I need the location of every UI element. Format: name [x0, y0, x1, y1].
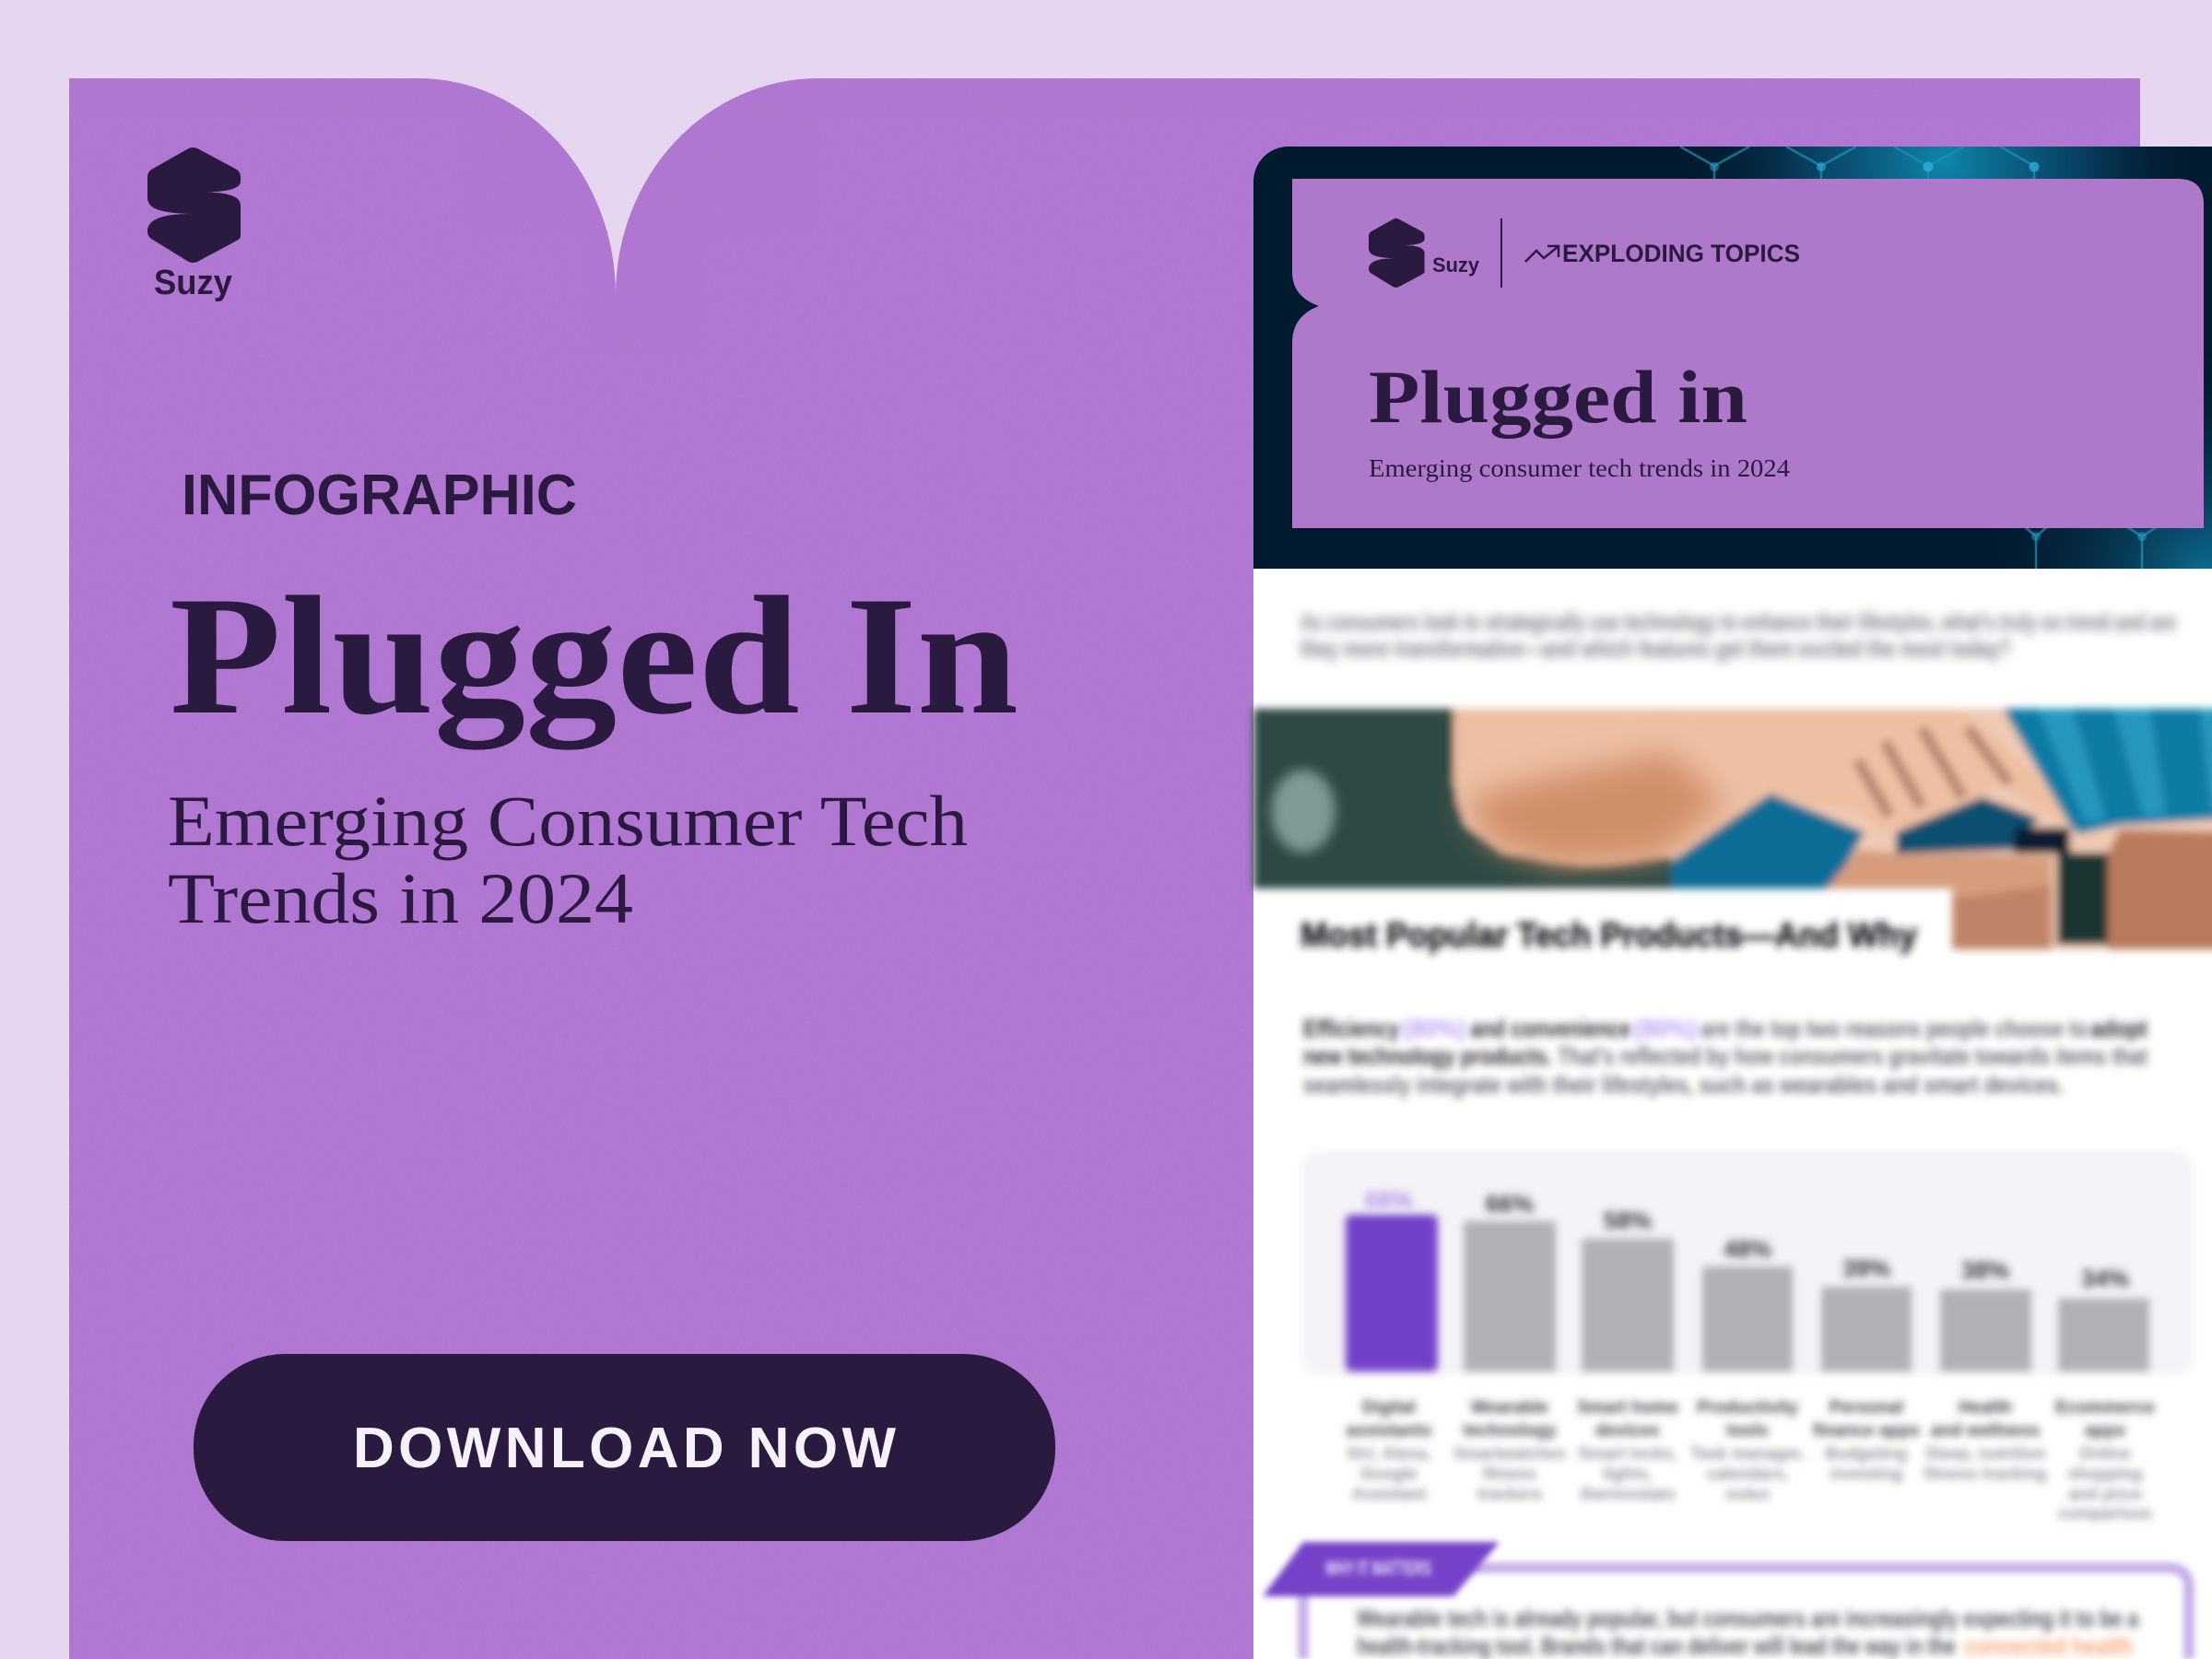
bar category labels: Productivity: [1697, 1398, 1798, 1418]
bar category labels: trackers: [1477, 1485, 1542, 1503]
panel: preview purple title card: [1292, 179, 2204, 528]
bar category labels: Smartwatches: [1453, 1444, 1566, 1463]
text block: blurred paragraph: Efficiency: [1303, 1015, 1400, 1042]
preview subtitle: Emerging consumer tech trends in 2024: [1369, 454, 1791, 482]
text block: blurred paragraph: new technology products.: [1303, 1042, 1552, 1070]
bar category labels: notes: [1725, 1485, 1770, 1503]
button: download now: [194, 1354, 1055, 1541]
callout: why it matters: [1263, 1542, 2189, 1659]
bar category labels: Ecommerce: [2055, 1398, 2155, 1418]
callout text: [1357, 1605, 2139, 1659]
bar chart: most popular products: [1301, 1150, 2194, 1523]
bar category labels: fitness: [1483, 1465, 1536, 1483]
subtitle: Emerging Consumer Tech: [168, 781, 968, 861]
panel: preview dark header with network pattern: [1253, 147, 2212, 569]
bar values: 66%: [1486, 1190, 1534, 1218]
bar category labels: Sleep, nutrition: [1924, 1444, 2046, 1463]
bar values: 39%: [1842, 1254, 1890, 1282]
bar category labels: tools: [1726, 1421, 1769, 1441]
callout tab: [1263, 1542, 1500, 1596]
bar category labels: assistants: [1347, 1421, 1431, 1441]
preview title: Plugged in: [1369, 355, 1747, 439]
bar category labels: Assistant: [1351, 1485, 1427, 1503]
bar category labels: Personal: [1830, 1398, 1903, 1418]
button: download now: DOWNLOAD NOW: [353, 1417, 896, 1480]
text block: blurred paragraph: (80%): [1634, 1015, 1697, 1042]
icon: small Suzy logo: [1369, 218, 1480, 288]
bar category labels: comparison: [2058, 1504, 2152, 1523]
bar values: 48%: [1724, 1235, 1771, 1263]
chart background: [1301, 1150, 2194, 1375]
heading: blurred section title: Most Popular Tech Products—And Why: [1300, 916, 1917, 954]
bar category labels: and wellness: [1931, 1421, 2040, 1441]
text block: blurred paragraph: [1303, 1015, 2147, 1099]
icon: exploding topics arrow: [1525, 246, 1559, 262]
bar category labels: Budgeting: [1826, 1444, 1907, 1463]
bar category labels: apps: [2085, 1421, 2125, 1441]
bar category labels: technology: [1463, 1421, 1557, 1441]
subtitle: [168, 781, 968, 938]
image: wrist and smartwatch photo: [1235, 687, 2212, 963]
bar category labels: Task manager,: [1690, 1444, 1805, 1463]
text block: blurred paragraph: and convenience: [1470, 1015, 1631, 1042]
bar category labels: Smart locks,: [1578, 1444, 1677, 1463]
bar category labels: [1347, 1398, 2155, 1523]
bar category labels: Siri, Alexa,: [1347, 1444, 1431, 1463]
callout tab label: WHY IT MATTERS: [1325, 1557, 1431, 1580]
bar category labels: Google: [1360, 1465, 1418, 1483]
text block: blurred intro: [1300, 607, 2176, 663]
bars: [1346, 1215, 2149, 1371]
bar category labels: fitness tracking: [1924, 1465, 2047, 1483]
bar category labels: lights,: [1604, 1465, 1652, 1483]
bar category labels: Wearable: [1471, 1398, 1548, 1418]
bar values: [1365, 1186, 2129, 1292]
bar category labels: investing: [1830, 1465, 1903, 1483]
title: Plugged In: [170, 561, 1018, 750]
callout border: [1303, 1568, 2189, 1659]
panel: infographic preview: [1235, 147, 2212, 1659]
bar values: 58%: [1604, 1206, 1652, 1234]
bar category labels: Digital: [1362, 1398, 1416, 1418]
divider: [1500, 218, 1502, 288]
text block: blurred paragraph: adopt: [2090, 1015, 2147, 1042]
bar category labels: and price: [2068, 1485, 2142, 1503]
subtitle: Trends in 2024: [168, 858, 633, 938]
bar values: 34%: [2081, 1265, 2129, 1292]
bar category labels: devices: [1595, 1421, 1660, 1441]
bar category labels: finance apps: [1813, 1421, 1920, 1441]
bar category labels: calendars,: [1706, 1465, 1789, 1483]
bar category labels: Smart home: [1577, 1398, 1678, 1418]
eyebrow: INFOGRAPHIC: INFOGRAPHIC: [182, 464, 577, 527]
bar category labels: Health: [1959, 1398, 2012, 1418]
bar category labels: Online: [2079, 1444, 2131, 1463]
bar category labels: thermostats: [1580, 1485, 1676, 1503]
bar values: 68%: [1365, 1186, 1413, 1214]
bar values: 38%: [1961, 1256, 2009, 1284]
icon: Suzy logo: Suzy: [154, 264, 232, 302]
text block: blurred paragraph: are the top two reasons people choose to: [1700, 1015, 2088, 1042]
text block: blurred paragraph: (80%): [1403, 1015, 1465, 1042]
icon: Suzy logo: [147, 147, 241, 302]
bar category labels: shopping: [2068, 1465, 2142, 1483]
panel: preview white page: [1253, 553, 2212, 1659]
logo text: exploding topics: EXPLODING TOPICS: [1562, 240, 1800, 267]
icon: small Suzy logo: Suzy: [1432, 253, 1480, 276]
